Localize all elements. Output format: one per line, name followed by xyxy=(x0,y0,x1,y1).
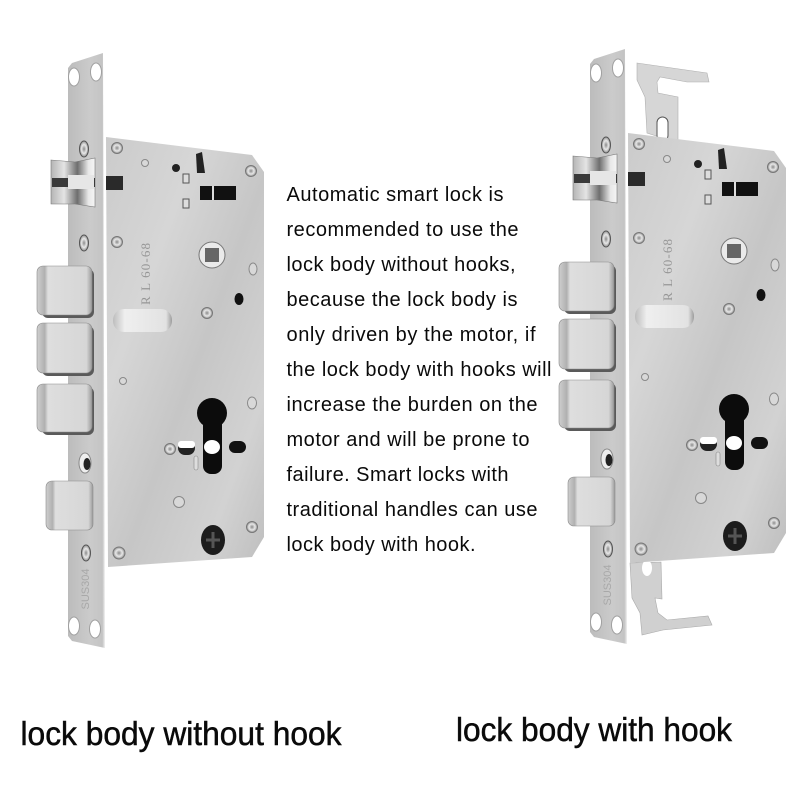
caption: lock body without hook: lock body without hook xyxy=(20,715,342,752)
text block: explanation: lock body with hook. xyxy=(286,534,476,556)
case plate xyxy=(628,133,786,563)
faceplate screws xyxy=(80,141,90,561)
mounting holes xyxy=(590,59,624,634)
deadbolt shadows xyxy=(42,269,94,435)
panel: lock body without hook xyxy=(37,53,264,648)
case plate xyxy=(106,137,264,567)
top mechanism holes xyxy=(694,148,758,204)
side black hole xyxy=(234,293,244,305)
top mechanism holes xyxy=(172,152,236,208)
stamp: SUS304 xyxy=(80,569,92,609)
cylinder side slots xyxy=(178,441,246,470)
text block: explanation: motor and will be prone to xyxy=(286,429,530,451)
text block: explanation: because the lock body is xyxy=(286,289,518,311)
small rivets xyxy=(120,160,257,508)
side black hole xyxy=(756,289,766,301)
oval bright slot xyxy=(113,309,172,332)
case screws xyxy=(112,142,258,559)
model text: R L 60-68 xyxy=(660,239,675,301)
top hook xyxy=(637,63,709,143)
faceplate xyxy=(68,53,105,648)
text block: explanation: recommended to use the xyxy=(286,219,518,241)
latch xyxy=(51,158,123,207)
caption: lock body with hook: lock body with hook xyxy=(456,711,732,748)
text block: explanation xyxy=(286,184,552,556)
panel: lock body with hook xyxy=(559,49,786,644)
oval bright slot xyxy=(635,305,694,328)
cylinder side slots xyxy=(700,437,768,466)
model text: R L 60-68 xyxy=(138,243,153,305)
faceplate xyxy=(590,49,627,644)
stamp: SUS304 xyxy=(602,565,614,605)
cylinder keyhole xyxy=(197,398,227,474)
text block: explanation: increase the burden on the xyxy=(286,394,538,416)
latch xyxy=(573,154,645,203)
text block: explanation: Automatic smart lock is xyxy=(286,184,504,206)
case screws xyxy=(634,138,780,555)
faceplate hole xyxy=(601,449,613,469)
bottom hook xyxy=(630,560,712,635)
spindle hole xyxy=(721,238,747,264)
small rivets xyxy=(642,156,779,504)
text block: explanation: lock body without hooks, xyxy=(286,254,516,276)
text block: explanation: traditional handles can use xyxy=(286,499,538,521)
mounting holes xyxy=(68,63,102,638)
faceplate screws xyxy=(602,137,612,557)
text block: explanation: the lock body with hooks will xyxy=(286,359,552,381)
black screw xyxy=(723,521,747,551)
text block: explanation: only driven by the motor, if xyxy=(286,324,536,346)
cylinder keyhole xyxy=(719,394,749,470)
deadbolt shadows xyxy=(564,265,616,431)
faceplate hole xyxy=(79,453,91,473)
deadbolts xyxy=(37,266,93,530)
text block: explanation: failure. Smart locks with xyxy=(286,464,508,486)
deadbolts xyxy=(559,262,615,526)
spindle hole xyxy=(199,242,225,268)
black screw xyxy=(201,525,225,555)
